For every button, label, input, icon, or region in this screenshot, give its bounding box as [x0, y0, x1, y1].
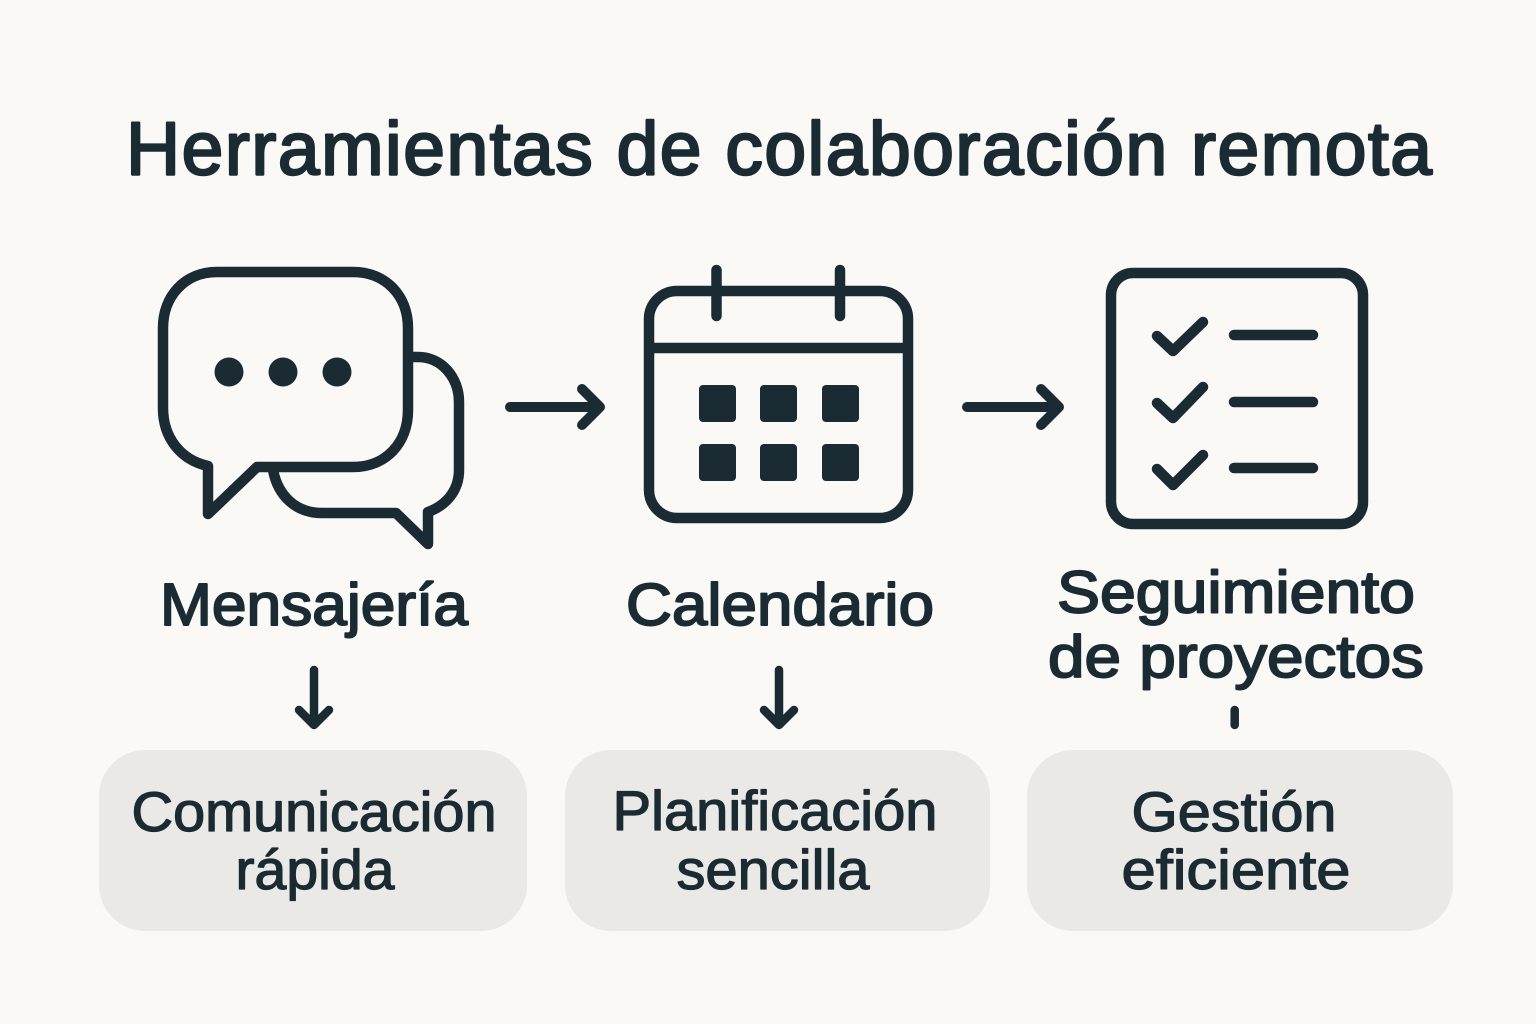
panel: Comunicación rápida: Comunicación [132, 780, 496, 843]
arrow: calendar to project tracking [967, 389, 1059, 425]
label: Seguimiento de proyectos: Seguimiento [1057, 560, 1415, 626]
label: Mensajería: Mensajería [160, 572, 468, 638]
panel: Gestión eficiente [1027, 750, 1453, 931]
arrow: Mensajería down [299, 670, 329, 725]
panel: Comunicación rápida [99, 750, 527, 931]
label: Seguimiento de proyectos [1048, 560, 1424, 690]
arrow stub: Seguimiento down [1230, 710, 1239, 725]
icon: checklist [1111, 273, 1363, 524]
icon: chat bubbles [163, 272, 459, 544]
title: Herramientas de colaboración remota [126, 106, 1432, 190]
panel: Planificación sencilla: sencilla [676, 838, 870, 901]
panel: Planificación sencilla [565, 750, 990, 931]
label: Seguimiento de proyectos: de proyectos [1048, 624, 1424, 690]
panel: Gestión eficiente: Gestión [1132, 780, 1336, 843]
panel: Gestión eficiente: eficiente [1122, 838, 1350, 901]
label: Calendario: Calendario [626, 572, 934, 638]
panel: Comunicación rápida: rápida [236, 838, 395, 901]
arrow: Calendario down [764, 670, 794, 725]
panel: Planificación sencilla: Planificación [612, 779, 938, 842]
arrow: messaging to calendar [510, 389, 600, 425]
icon: calendar [649, 270, 908, 518]
